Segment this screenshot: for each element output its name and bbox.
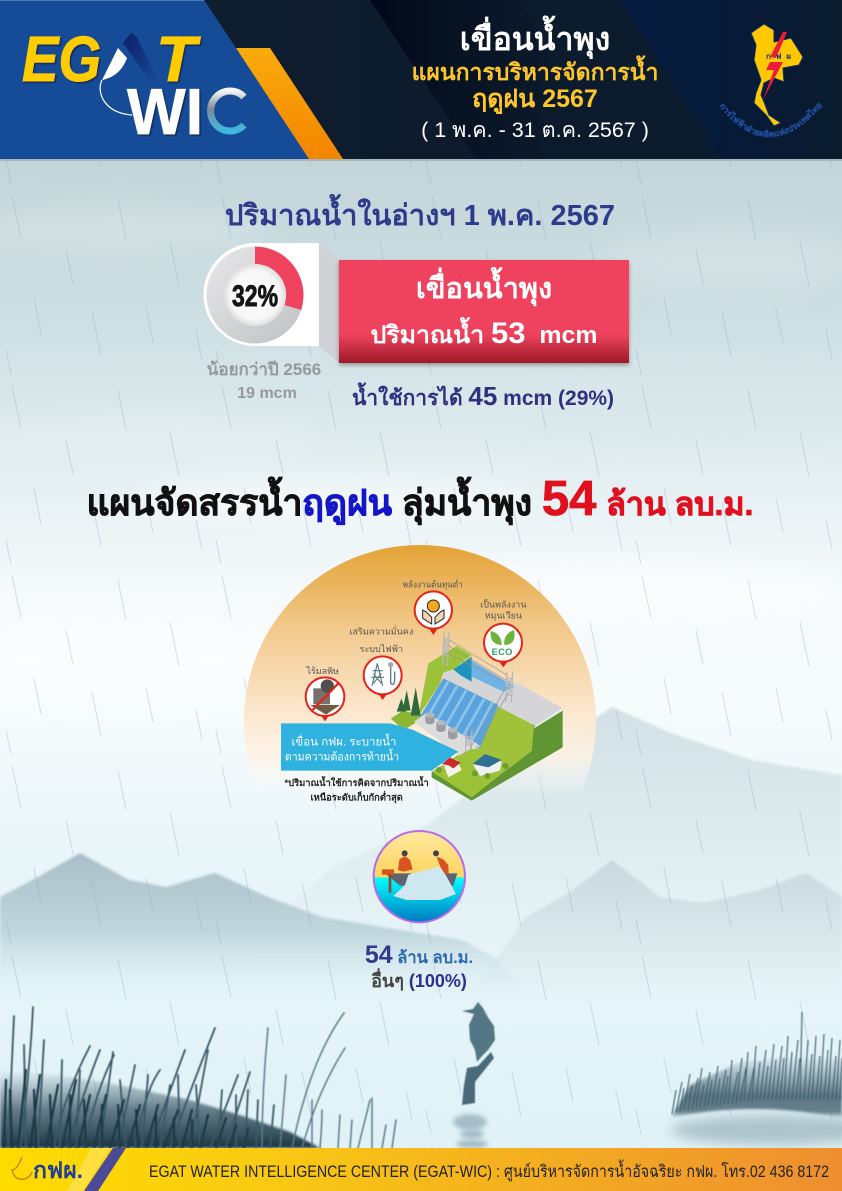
header titles: แผนการบริหารจัดการน้ำ [412, 55, 658, 85]
dam left hill and reservoir [391, 646, 515, 730]
pin: renewable [480, 597, 526, 667]
header titles: เขื่อนน้ำพุง [460, 15, 610, 60]
blue release banner: ตามความต้องการท้ายน้ำ [285, 748, 399, 763]
reservoir gauge [204, 243, 629, 363]
pin: renewable: เป็นพลังงาน [480, 597, 526, 609]
pylons [443, 632, 513, 763]
pin: low cost energy: พลังงานต้นทุนต่ำ [403, 577, 463, 590]
logo EGAT WIC: WI [127, 75, 203, 148]
pin: grid stability: เสริมความมั่นคง [349, 625, 413, 637]
comparison with previous year: 19 mcm [237, 385, 297, 402]
pin: grid stability [349, 625, 413, 700]
pine trees [397, 688, 421, 716]
mountains far [240, 707, 842, 1000]
EGAT Thailand logo: ก ฟ ผ [766, 52, 791, 61]
header titles: ฤดูฝน 2567 [472, 85, 598, 115]
fishermen [398, 850, 449, 873]
red dam box [339, 260, 629, 363]
pin: renewable: หมุนเวียน [485, 611, 522, 622]
header [0, 0, 842, 161]
pin: no pollution [305, 666, 344, 721]
usable water note: เหนือระดับเก็บกักต่ำสุด [310, 791, 403, 804]
section heading: ปริมาณน้ำในอ่างฯ 1 พ.ค. 2567 [225, 193, 615, 232]
usable water: น้ำใช้การได้ 45 mcm (29%) [352, 381, 614, 411]
donut chart 32% [206, 246, 304, 344]
dam right hill [432, 670, 563, 801]
fishing allocation label: 54 ล้าน ลบ.ม. [365, 941, 473, 969]
red dam box: ปริมาณน้ำ 53 mcm [370, 316, 598, 350]
sun circle [244, 545, 596, 897]
fishing allocation label: อื่นๆ (100%) [371, 968, 467, 991]
right reeds [670, 1012, 842, 1145]
usable water note [285, 775, 429, 804]
pin: renewable: ECO [492, 647, 512, 657]
boat [382, 869, 457, 893]
header titles [412, 15, 658, 142]
header titles: ( 1 พ.ค. - 31 ต.ค. 2567 ) [421, 118, 649, 142]
logo EGAT WIC: EG [22, 23, 101, 95]
EGAT footer logo: กฟผ. [33, 1157, 83, 1183]
net [393, 867, 456, 900]
usable water note: *ปริมาณน้ำใช้การคิดจากปริมาณน้ำ [285, 775, 429, 788]
comparison with previous year [207, 359, 321, 402]
blue release banner: เขื่อน กฟผ. ระบายน้ำ [291, 734, 396, 749]
fishing icon [374, 831, 465, 923]
pin: low cost energy [403, 577, 463, 635]
logo EGAT WIC: T [156, 23, 201, 95]
bird on stump [453, 1002, 495, 1148]
spillway [417, 678, 498, 748]
misty clouds [0, 212, 842, 700]
EGAT Thailand logo: การไฟฟ้าฝ่ายผลิตแห่งประเทศไทย [719, 102, 822, 138]
mountains near [0, 853, 842, 1040]
pin: grid stability: ระบบไฟฟ้า [360, 644, 403, 654]
plan heading: แผนจัดสรรน้ำฤดูฝน ลุ่มน้ำพุง 54 ล้าน ลบ.ม. [87, 472, 753, 526]
blue release banner [281, 723, 458, 771]
left reeds [0, 1007, 396, 1148]
fishing allocation label [365, 941, 473, 991]
dam illustration [281, 577, 563, 804]
donut chart 32%: 32% [232, 280, 278, 313]
powerhouse [414, 712, 481, 757]
footer bar [0, 1148, 842, 1191]
EGAT Thailand logo [719, 24, 822, 138]
pin: no pollution: ไร้มลพิษ [305, 666, 339, 676]
red dam box: เขื่อนน้ำพุง [416, 266, 552, 306]
village [432, 748, 511, 801]
comparison with previous year: น้อยกว่าปี 2566 [207, 359, 321, 379]
logo EGAT WIC [22, 23, 244, 148]
